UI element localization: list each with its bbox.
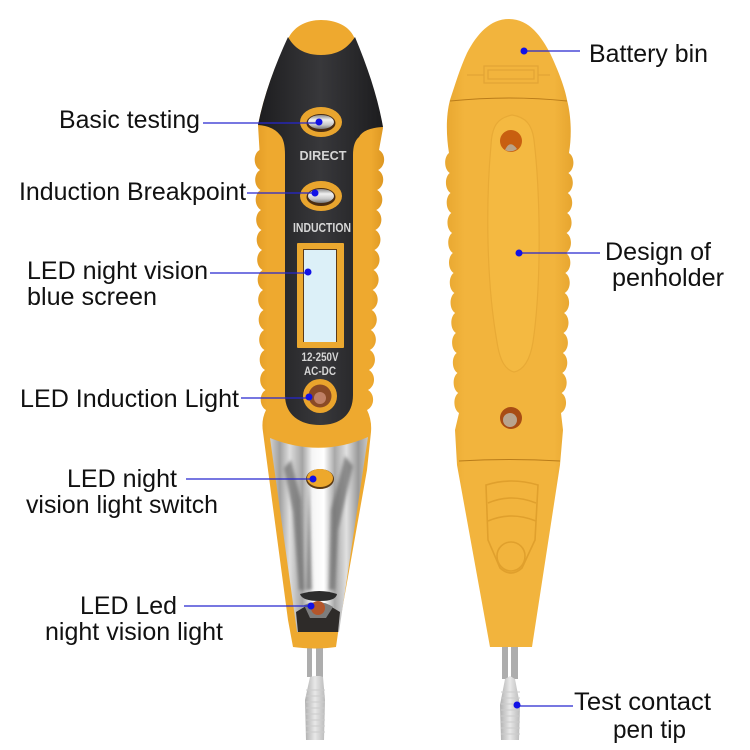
yellow pen body (back) [445, 19, 573, 647]
black shell [258, 37, 383, 425]
LED lens [311, 601, 325, 615]
label: LED night vision light switch [26, 465, 316, 519]
label: test contact pen tip: pen tip [613, 716, 686, 744]
label: test contact pen tip [514, 688, 711, 744]
label: basic testing [59, 106, 322, 134]
label: induction breakpoint: Induction Breakpoint [19, 178, 246, 206]
label: test contact pen tip: Test contact [574, 688, 711, 716]
label: basic testing: Basic testing [59, 106, 200, 134]
label: design of penholder [516, 238, 724, 292]
text: AC-DC: AC-DC [304, 364, 336, 378]
embossed grip pattern [486, 481, 538, 573]
label: LED night vision blue screen: blue screen [27, 283, 157, 311]
body seam [459, 460, 560, 461]
label: LED Led night vision light: LED Led [80, 592, 177, 620]
label: battery bin: Battery bin [589, 40, 708, 68]
penholder grip panel [488, 115, 539, 372]
label: LED night vision blue screen: LED night vision [27, 257, 208, 285]
label: LED induction light: LED Induction Light [20, 385, 239, 413]
battery cover seam [450, 98, 567, 101]
text: DIRECT: DIRECT [300, 148, 347, 163]
LCD screen [297, 243, 344, 348]
yellow pen body (front) [255, 20, 384, 648]
label: battery bin [520, 40, 708, 68]
lower screw hole [500, 407, 522, 429]
label: design of penholder: Design of [605, 238, 711, 266]
night vision switch [306, 469, 334, 489]
pen tip (back) [500, 647, 520, 740]
text: INDUCTION: INDUCTION [293, 220, 351, 235]
label: LED Led night vision light: night vision light [45, 618, 223, 646]
label: LED Led night vision light [45, 592, 314, 646]
label: LED night vision blue screen [27, 257, 312, 311]
silver metal section [270, 437, 368, 632]
label: design of penholder: penholder [612, 264, 724, 292]
label: LED night vision light switch: vision light switch [26, 491, 218, 519]
text: 12-250V: 12-250V [302, 350, 338, 364]
pen tip (front) [305, 647, 325, 740]
label: LED night vision light switch: LED night [67, 465, 177, 493]
induction light [303, 379, 337, 413]
embossed battery label [467, 66, 550, 83]
right pen: back view [445, 19, 573, 740]
upper screw hole [500, 130, 522, 152]
button: INDUCTION [300, 181, 342, 211]
button: DIRECT [300, 107, 342, 137]
left pen: front view [255, 20, 384, 740]
